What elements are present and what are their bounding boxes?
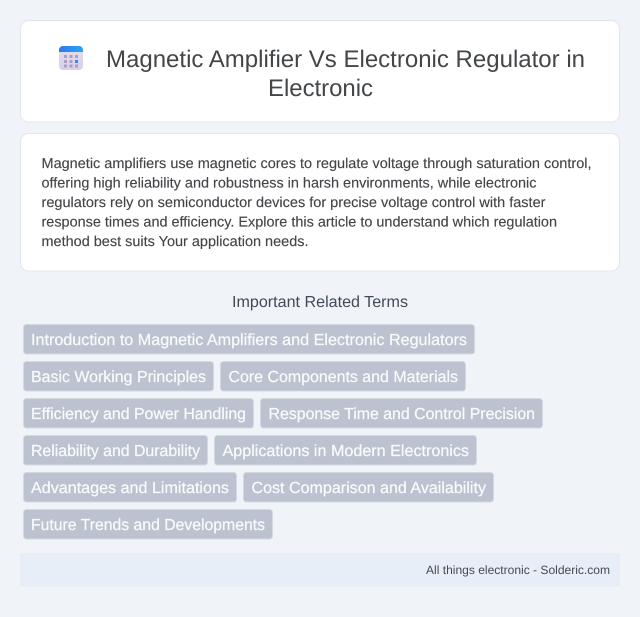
panel: title card: [20, 20, 620, 122]
heading: important related terms: Important Related Terms: [232, 294, 408, 311]
tag: cost comparison: Cost Comparison and Availability: [252, 480, 486, 497]
tag: basic working principles: Basic Working Principles: [31, 369, 206, 386]
text block: introduction paragraph: Magnetic amplifiers use magnetic cores to regulate voltage through saturation control,: [42, 156, 592, 172]
text block: introduction paragraph: [42, 156, 592, 250]
tag: response time: Response Time and Control Precision: [268, 406, 535, 423]
tag: future trends: [24, 510, 272, 539]
tag: core components: Core Components and Materials: [228, 369, 458, 386]
title: [106, 46, 585, 102]
title: Magnetic Amplifier Vs Electronic Regulator in: [106, 46, 585, 73]
tag: efficiency: [24, 398, 254, 428]
text block: introduction paragraph: response times and efficiency. Explore this article to understand which regulation: [42, 214, 557, 230]
tag: advantages: Advantages and Limitations: [31, 480, 229, 497]
tag: reliability: [24, 436, 208, 465]
tag: cost comparison: [244, 472, 494, 502]
tag: applications: Applications in Modern Electronics: [222, 443, 469, 460]
tag: efficiency: Efficiency and Power Handling: [31, 406, 246, 423]
tag: introduction: Introduction to Magnetic Amplifiers and Electronic Regulators: [31, 332, 467, 349]
tag: applications: [214, 436, 476, 465]
tag: future trends: Future Trends and Developments: [31, 517, 265, 534]
text block: introduction paragraph: regulators rely on semiconductor devices for precise voltage control with faster: [42, 195, 546, 211]
tag: advantages: [24, 472, 236, 502]
tag: basic working principles: [24, 362, 214, 391]
text block: introduction paragraph: method best suits Your application needs.: [42, 234, 308, 250]
footer: All things electronic - Solderic.com: [426, 563, 610, 577]
panel: related term tags: [24, 324, 542, 539]
panel: introduction: [20, 134, 620, 271]
tag: introduction: [24, 324, 474, 354]
icon: calendar: [59, 46, 83, 70]
text block: introduction paragraph: offering high reliability and robustness in harsh environments, while electronic: [42, 176, 536, 192]
title: Electronic: [268, 75, 373, 102]
footer: [20, 553, 620, 587]
tag: response time: [260, 398, 542, 428]
tag: core components: [220, 362, 466, 391]
tag: reliability: Reliability and Durability: [31, 443, 200, 460]
